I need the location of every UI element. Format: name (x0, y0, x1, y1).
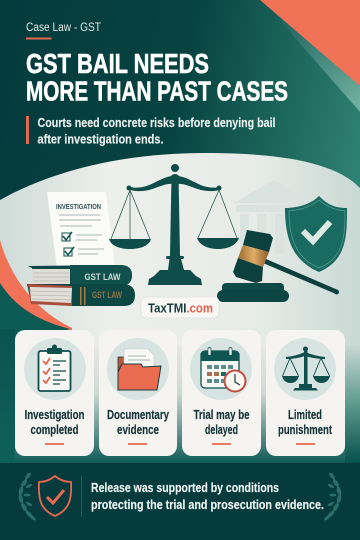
label: Trial may be (194, 408, 250, 422)
shield (285, 196, 347, 272)
investigation document (47, 192, 115, 268)
balance scale (109, 164, 239, 285)
label: evidence (117, 423, 159, 437)
eyebrow: Case Law - GST (26, 22, 101, 34)
footer text (91, 481, 324, 512)
title (26, 48, 288, 106)
eyebrow rule (26, 38, 52, 40)
panel: documentary evidence (99, 330, 177, 456)
coral and teal swoosh (0, 240, 72, 463)
icon: clipboard checklist (24, 338, 86, 400)
subtitle (26, 116, 276, 146)
icon: scales (274, 338, 336, 400)
icon: shield check (39, 476, 71, 516)
TaxTMI badge: TaxTMI.com (148, 302, 213, 316)
icon: right laurel (323, 472, 342, 521)
courthouse (233, 180, 311, 254)
books: GST LAW (27, 265, 135, 306)
books: GST LAW: GST LAW (84, 272, 121, 283)
TaxTMI badge (141, 297, 219, 318)
label: Limited (288, 408, 322, 422)
footer band (0, 463, 360, 540)
panel: limited punishment (266, 330, 345, 456)
label: completed (30, 423, 78, 437)
icon: calendar and clock (190, 338, 252, 400)
subtitle: after investigation ends. (38, 132, 164, 146)
footer text: protecting the trial and prosecution evidence. (91, 498, 324, 512)
coral corner with teal band (260, 0, 360, 112)
label: Documentary (107, 408, 169, 422)
panel: trial may be delayed (182, 330, 261, 456)
footer text: Release was supported by conditions (91, 481, 279, 495)
panel: investigation completed (15, 330, 94, 456)
accent rule (212, 443, 231, 445)
lower background (0, 345, 360, 463)
title: GST BAIL NEEDS (26, 48, 209, 79)
accent rule (296, 443, 315, 445)
accent rule (45, 443, 64, 445)
investigation document: INVESTIGATION (56, 204, 101, 211)
label (278, 408, 333, 437)
label: punishment (278, 423, 333, 437)
label (107, 408, 169, 437)
footer divider (81, 476, 82, 517)
icon: folder (107, 338, 169, 400)
icon: left laurel (18, 472, 37, 521)
label: delayed (205, 423, 238, 437)
accent rule (128, 443, 147, 445)
hero background (0, 153, 360, 345)
label (24, 408, 84, 437)
label: Investigation (24, 408, 84, 422)
subtitle: Courts need concrete risks before denying bail (38, 116, 276, 130)
label (194, 408, 250, 437)
books: GST LAW: GST LAW (92, 290, 122, 301)
gavel (217, 230, 339, 302)
